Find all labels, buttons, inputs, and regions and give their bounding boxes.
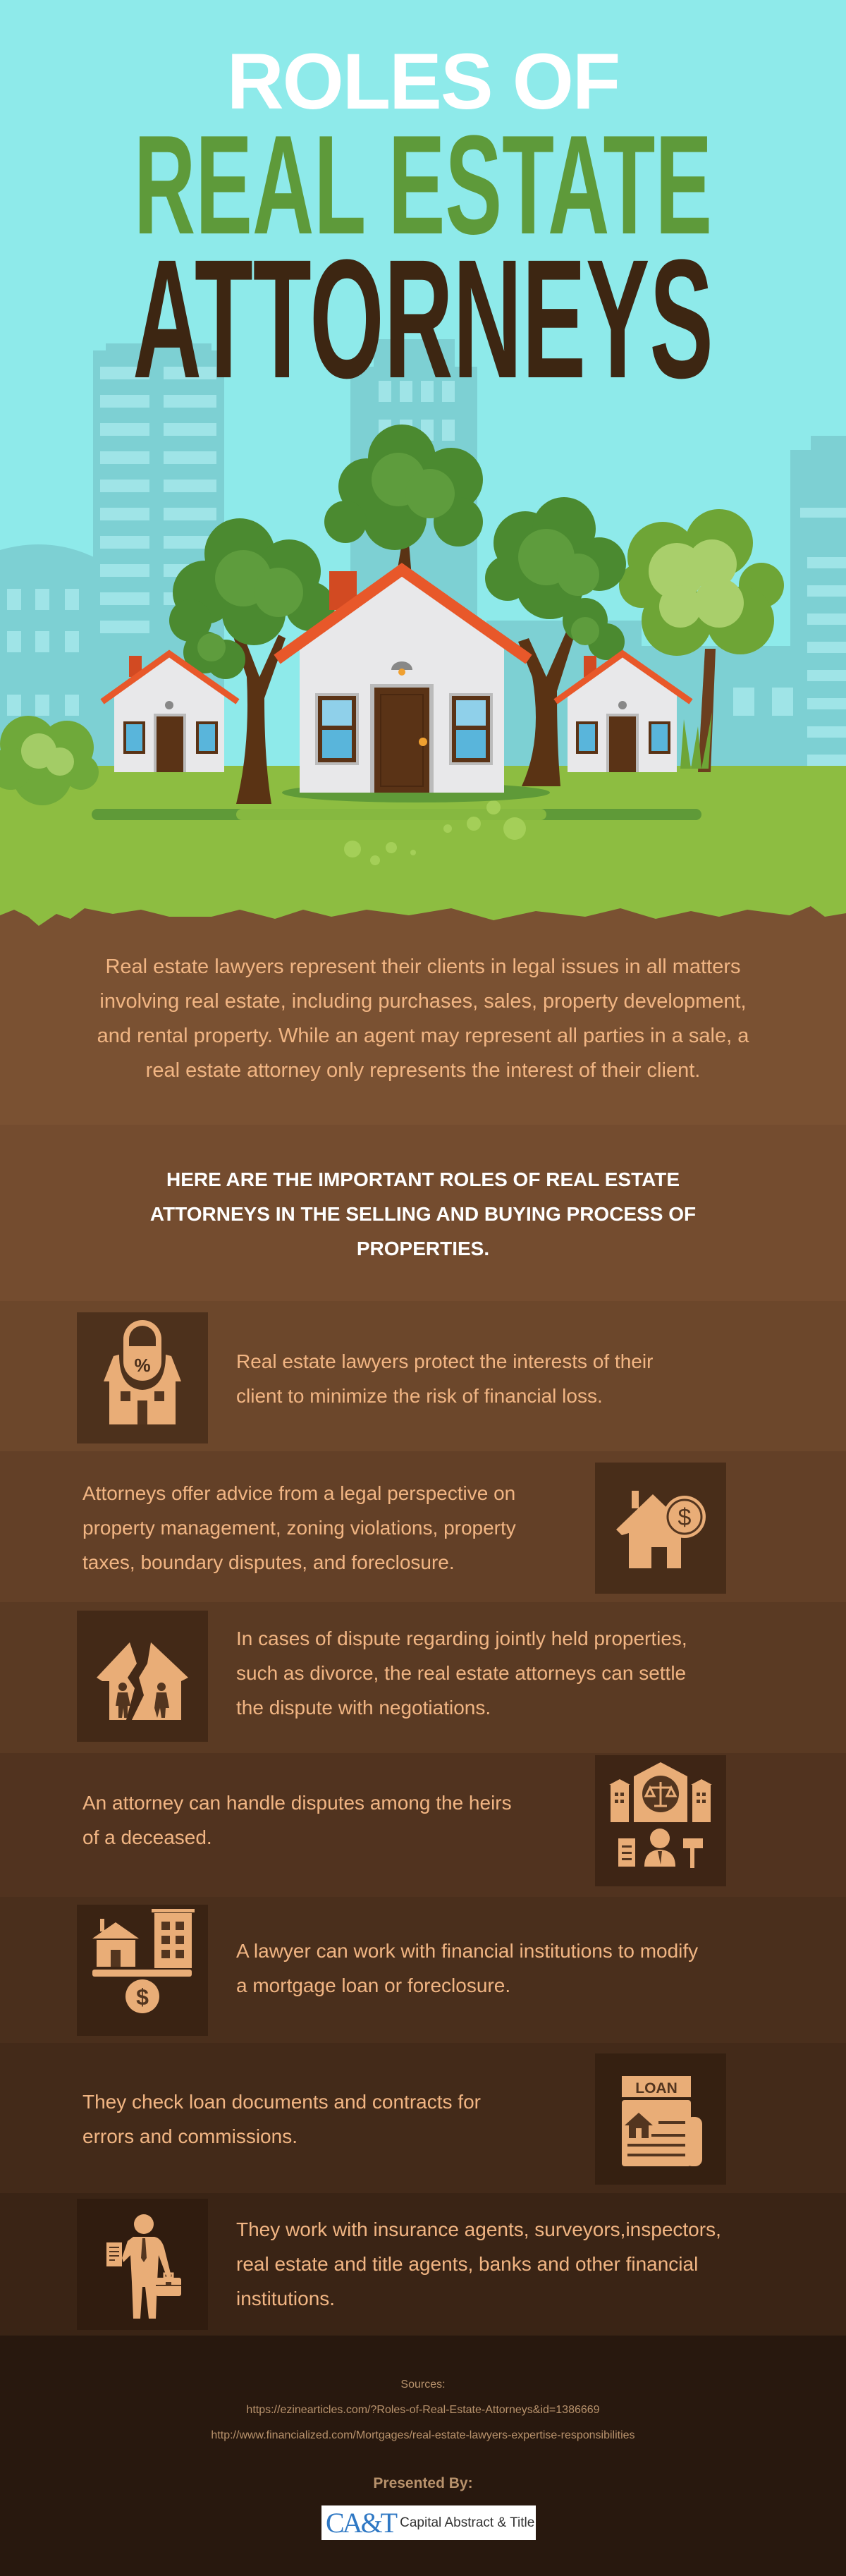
icon: loan document bbox=[595, 2053, 726, 2185]
text 6 bbox=[82, 2091, 481, 2147]
intro paragraph: Real estate lawyers represent their clients in legal issues in all matters bbox=[105, 956, 740, 978]
icon: house with percent lock bbox=[77, 1312, 208, 1443]
text 3: the dispute with negotiations. bbox=[236, 1697, 491, 1719]
text 4: of a deceased. bbox=[82, 1826, 212, 1848]
sources: Sources: bbox=[400, 2379, 446, 2391]
text 4: An attorney can handle disputes among the heirs bbox=[82, 1792, 512, 1814]
row 5 bbox=[77, 1905, 698, 2036]
intro paragraph: involving real estate, including purchases, sales, property development, bbox=[99, 990, 747, 1013]
text 3 bbox=[236, 1628, 687, 1719]
text 2: taxes, boundary disputes, and foreclosure. bbox=[82, 1551, 455, 1573]
text 5: A lawyer can work with financial institutions to modify bbox=[236, 1940, 698, 1962]
row 6 bbox=[82, 2053, 726, 2185]
background bands bbox=[0, 881, 846, 1125]
text 7: real estate and title agents, banks and other financial bbox=[236, 2253, 698, 2275]
row 1 bbox=[77, 1312, 653, 1443]
icon: house and building on scale with dollar: $ bbox=[136, 1984, 149, 2010]
grass bbox=[0, 766, 846, 926]
grass tuft bbox=[680, 712, 712, 769]
icon: house and building on scale with dollar bbox=[77, 1905, 208, 2036]
title line 3: ATTORNEYS: ATTORNEYS bbox=[133, 224, 713, 413]
section heading bbox=[150, 1168, 696, 1259]
title bbox=[133, 37, 713, 413]
title line 2: REAL ESTATE: REAL ESTATE bbox=[134, 106, 712, 264]
icon: loan document: LOAN bbox=[635, 2080, 678, 2096]
icon: broken house with couple bbox=[77, 1611, 208, 1742]
path strip bbox=[92, 809, 701, 820]
text 4 bbox=[82, 1792, 512, 1848]
icon: house with percent lock: % bbox=[134, 1355, 151, 1376]
icon: courthouse with judge bbox=[595, 1755, 726, 1886]
hero scene bbox=[0, 0, 846, 926]
top center tree bbox=[395, 543, 412, 585]
text 6: They check loan documents and contracts for bbox=[82, 2091, 481, 2113]
text 1: Real estate lawyers protect the interests of their bbox=[236, 1350, 653, 1372]
logo: Capital Abstract & Title: CA&T bbox=[326, 2506, 396, 2539]
icon: businessman with clipboard and briefcase bbox=[77, 2199, 208, 2330]
text 2: Attorneys offer advice from a legal perspective on bbox=[82, 1482, 515, 1504]
left small house bbox=[102, 654, 238, 772]
text 7: institutions. bbox=[236, 2288, 335, 2309]
text 3: In cases of dispute regarding jointly held properties, bbox=[236, 1628, 687, 1649]
section heading: ATTORNEYS IN THE SELLING AND BUYING PROCESS OF bbox=[150, 1203, 696, 1225]
text 6: errors and commissions. bbox=[82, 2125, 298, 2147]
section heading: PROPERTIES. bbox=[357, 1238, 489, 1259]
row 7 bbox=[77, 2199, 721, 2330]
row 2 bbox=[82, 1463, 726, 1594]
icon: house with dollar coin bbox=[595, 1463, 726, 1594]
intro paragraph bbox=[97, 956, 749, 1082]
left tree bbox=[233, 635, 286, 804]
text 1: client to minimize the risk of financial loss. bbox=[236, 1385, 603, 1407]
buildings bbox=[0, 339, 846, 776]
big house bbox=[277, 570, 529, 793]
text 2 bbox=[82, 1482, 516, 1573]
sources bbox=[211, 2379, 635, 2441]
left bush bbox=[0, 716, 99, 805]
section heading: HERE ARE THE IMPORTANT ROLES OF REAL ESTATE bbox=[166, 1168, 680, 1190]
right small house bbox=[556, 654, 691, 772]
right tree bbox=[518, 621, 578, 786]
logo: Capital Abstract & Title: Capital Abstract & Title bbox=[400, 2515, 534, 2530]
row 3 bbox=[77, 1611, 687, 1742]
presented by: Presented By: bbox=[373, 2475, 473, 2491]
text 7: They work with insurance agents, surveyors,inspectors, bbox=[236, 2218, 721, 2240]
text 3: such as divorce, the real estate attorneys can settle bbox=[236, 1662, 686, 1684]
far right tree bbox=[698, 649, 716, 772]
intro paragraph: and rental property. While an agent may represent all parties in a sale, a bbox=[97, 1025, 749, 1047]
text 2: property management, zoning violations, property bbox=[82, 1517, 516, 1539]
house shadow bbox=[282, 783, 550, 802]
icon: house with dollar coin: $ bbox=[678, 1504, 692, 1531]
row 4 bbox=[82, 1755, 726, 1886]
sources: https://ezinearticles.com/?Roles-of-Real-Estate-Attorneys&id=1386669 bbox=[246, 2404, 600, 2416]
text 5: a mortgage loan or foreclosure. bbox=[236, 1974, 510, 1996]
text 1 bbox=[236, 1350, 653, 1407]
text 5 bbox=[236, 1940, 698, 1996]
intro paragraph: real estate attorney only represents the interest of their client. bbox=[146, 1059, 700, 1082]
sources: http://www.financialized.com/Mortgages/real-estate-lawyers-expertise-responsibilities bbox=[211, 2429, 635, 2441]
title line 1: ROLES OF: ROLES OF bbox=[227, 37, 619, 126]
logo: Capital Abstract & Title bbox=[321, 2505, 536, 2540]
text 7 bbox=[236, 2218, 721, 2309]
